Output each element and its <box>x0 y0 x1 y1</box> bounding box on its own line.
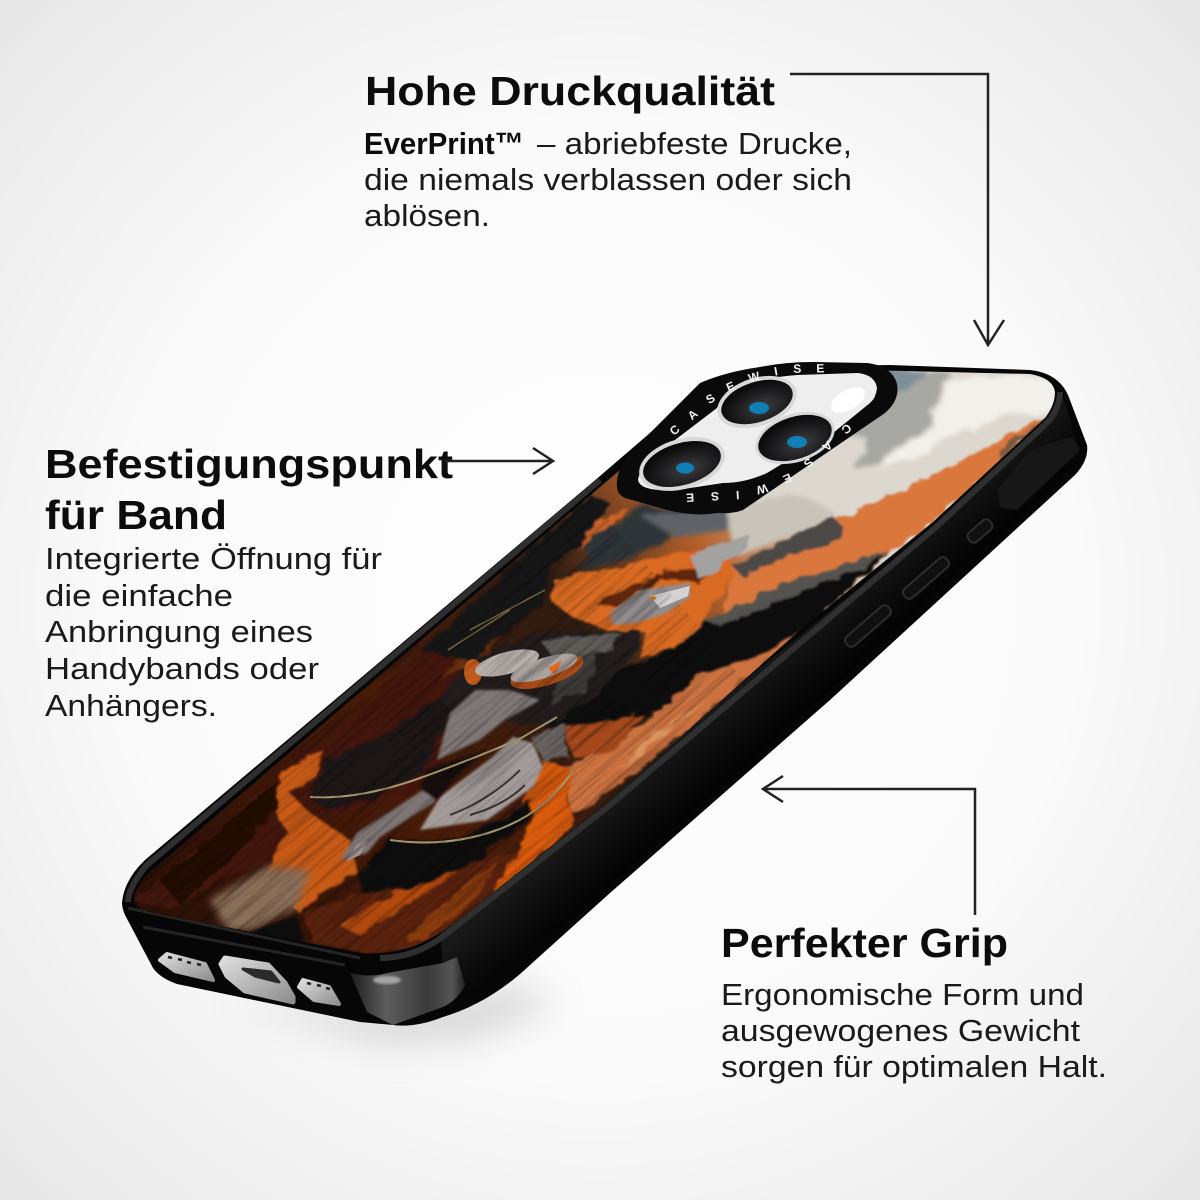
callout: strap mount <box>45 441 453 723</box>
rock <box>210 867 310 945</box>
right side buttons <box>843 437 1080 649</box>
text block: Anbringung eines <box>45 614 313 649</box>
bottom wall highlight <box>128 908 360 965</box>
text block: ablösen. <box>364 198 490 233</box>
text block: sorgen für optimalen Halt. <box>721 1049 1107 1084</box>
lens left <box>633 428 731 500</box>
bottom: metal corner <box>350 957 465 1025</box>
ring text bottom: CASEWISE <box>686 424 851 502</box>
face <box>610 583 690 625</box>
arrow: to side edge <box>763 776 975 915</box>
bezel highlight <box>128 392 1060 958</box>
text block: ausgewogenes Gewicht <box>721 1013 1080 1048</box>
orange brushstrokes <box>262 750 577 953</box>
left wing <box>420 495 630 660</box>
text block <box>364 126 852 233</box>
text block: EverPrint™ <box>364 126 524 161</box>
callout: grip <box>721 920 1107 1084</box>
bottom: charging port <box>221 958 293 1002</box>
art base <box>134 371 996 954</box>
hair <box>553 535 750 657</box>
chest <box>464 649 584 689</box>
text block: Anhängers. <box>45 688 217 723</box>
text block <box>45 541 382 723</box>
callout: print quality <box>364 68 852 233</box>
dark lower field <box>135 634 507 910</box>
heading: Hohe Druckqualität <box>365 68 775 114</box>
heading <box>45 441 453 538</box>
heading: für Band <box>45 492 227 538</box>
text block: Ergonomische Form und <box>721 977 1084 1012</box>
dark cloth <box>310 680 533 893</box>
arrow: to top edge <box>790 74 1004 345</box>
island ring <box>617 362 898 514</box>
text block: Integrierte Öffnung für <box>45 541 382 576</box>
arrow: to strap mount <box>445 448 553 474</box>
flash highlight <box>827 382 869 418</box>
lens top <box>711 367 803 437</box>
ring text top: CASEWISE <box>670 364 824 434</box>
camera island <box>616 362 898 514</box>
text block: – abriebfeste Drucke, <box>537 126 852 161</box>
orange land <box>560 418 1050 815</box>
heading: Perfekter Grip <box>721 920 1008 966</box>
phone case <box>122 362 1088 1026</box>
phone shadow <box>230 985 555 1045</box>
text block: die niemals verblassen oder sich <box>364 162 852 197</box>
body and legs <box>310 590 573 862</box>
text block: Handybands oder <box>45 651 319 686</box>
text block: die einfache <box>45 578 233 613</box>
case body <box>122 365 1087 1026</box>
brush streak texture <box>138 514 742 954</box>
torso <box>440 630 640 725</box>
clouds <box>577 368 1060 573</box>
text block <box>721 977 1107 1084</box>
lower hair and wing glow <box>563 713 643 757</box>
bottom: left speaker <box>160 954 213 980</box>
right wing <box>545 550 888 737</box>
side face sheen <box>440 395 1078 1000</box>
lens right <box>749 403 841 473</box>
chains <box>310 717 573 842</box>
artwork on back <box>134 370 1055 954</box>
camera plate <box>638 373 877 490</box>
heading: Befestigungspunkt <box>45 441 453 487</box>
bottom: right speaker <box>299 980 339 1004</box>
